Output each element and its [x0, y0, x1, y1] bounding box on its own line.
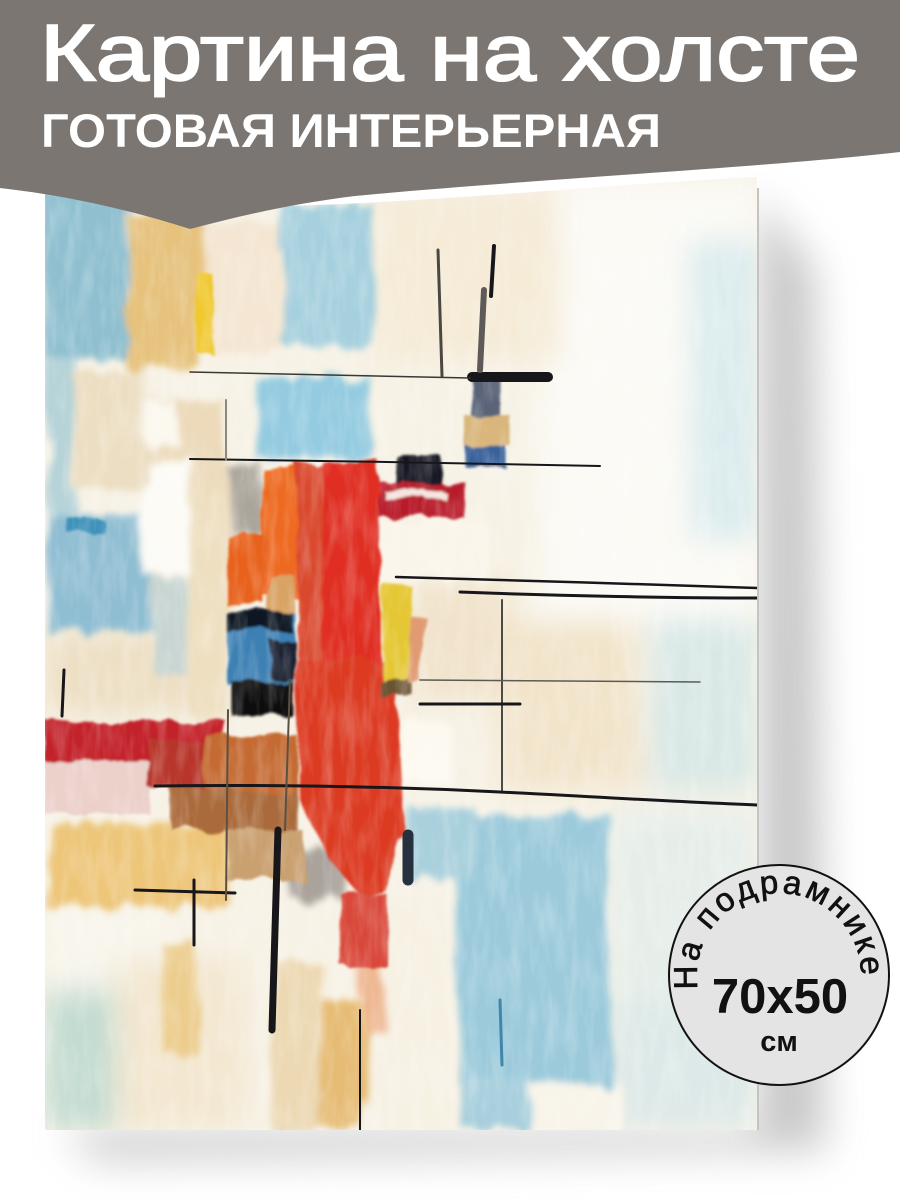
top-right dark marks — [395, 455, 440, 483]
brush texture — [45, 199, 706, 1130]
tan square — [270, 576, 294, 618]
lower red drips — [340, 893, 386, 965]
canvas shadow — [60, 195, 825, 1160]
badge circle — [669, 865, 889, 1085]
badge: size on stretcher — [668, 864, 890, 1086]
grey patch — [226, 465, 264, 533]
black strokes — [62, 246, 757, 1130]
canvas side edge — [755, 188, 759, 1130]
soft colour fields — [45, 180, 760, 1130]
badge arc label: На подрамнике — [674, 876, 879, 988]
orange block — [262, 468, 300, 598]
lower blue panel — [458, 815, 610, 1085]
header ribbon — [0, 0, 900, 229]
vivid yellow stroke — [196, 272, 211, 352]
subtitle: ГОТОВАЯ ИНТЕРЬЕРНАЯ — [41, 104, 661, 157]
lower ochre bands — [45, 822, 235, 907]
top blue block — [282, 205, 374, 345]
painting base — [45, 170, 757, 1130]
title: Картина на холсте — [40, 8, 860, 97]
dark blue and black patch — [226, 612, 294, 684]
mid blue block — [258, 378, 373, 460]
badge size: 70x50 — [712, 970, 848, 1024]
lower left red band — [45, 720, 225, 770]
left mid blue — [45, 515, 157, 633]
red block — [297, 465, 325, 665]
top-left blue column — [45, 190, 130, 360]
yellow dab — [382, 584, 410, 684]
painting — [45, 170, 760, 1130]
white dabs — [143, 458, 193, 576]
ochre column — [126, 215, 202, 370]
rust section — [205, 735, 297, 810]
badge unit: см — [760, 1026, 798, 1058]
left cream block — [148, 394, 234, 496]
